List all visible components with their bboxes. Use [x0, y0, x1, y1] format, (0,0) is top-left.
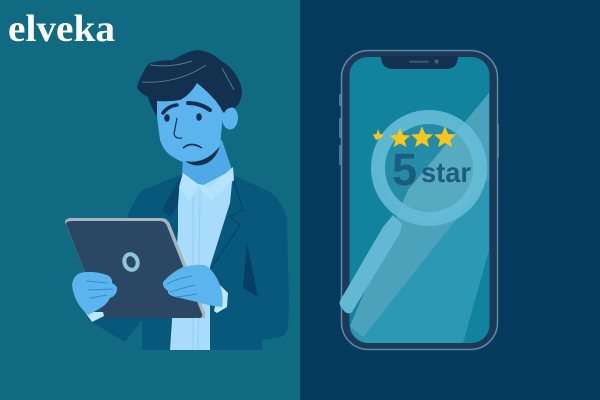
- glare band: [350, 93, 489, 337]
- left hand: [72, 272, 117, 315]
- star 2: [411, 126, 433, 147]
- phone screen: [350, 57, 490, 343]
- tablet logo: [122, 252, 140, 272]
- star 1: [390, 128, 410, 147]
- left eye: [164, 114, 170, 122]
- star 3: [434, 126, 456, 147]
- logo: elveka: elveka: [8, 8, 115, 50]
- right fingers: [167, 276, 197, 297]
- left shirt cuff: [85, 312, 104, 322]
- right eyebrow: [188, 103, 210, 110]
- camera: [434, 59, 439, 64]
- illustration: worried man: [65, 50, 289, 350]
- neck: [182, 140, 232, 188]
- jacket: [88, 175, 289, 350]
- screen glare: [350, 93, 489, 343]
- jaw shadow: [185, 146, 220, 166]
- phone mockup: [339, 50, 499, 350]
- right lapel: [210, 177, 243, 270]
- right hand: [163, 265, 223, 307]
- collar: [179, 167, 234, 201]
- nose: [174, 118, 182, 138]
- tablet back: [66, 221, 202, 318]
- magnifier lens: [378, 117, 480, 219]
- panel: left background: [0, 0, 300, 400]
- rating text: 5: 5: [392, 144, 417, 195]
- hair: [137, 50, 242, 117]
- partial star: [373, 129, 384, 140]
- left eyebrow: [163, 105, 177, 113]
- phone body: [342, 50, 498, 350]
- side buttons: [339, 94, 499, 165]
- speaker: [409, 60, 429, 63]
- tablet edge: [65, 218, 205, 318]
- right eye: [196, 113, 202, 121]
- right cuff: [214, 285, 228, 313]
- frown: [183, 144, 202, 148]
- ear: [222, 106, 238, 130]
- jacket shadow fold: [243, 243, 258, 297]
- tablet: [65, 218, 205, 318]
- face: [157, 75, 223, 163]
- panel: right background: [300, 0, 600, 400]
- left fingers: [86, 281, 113, 298]
- notch: [381, 56, 458, 69]
- left lapel: [162, 177, 180, 217]
- rating text: star: star: [421, 157, 471, 188]
- shirt placket: [193, 190, 200, 350]
- magnifier handle: [340, 215, 402, 314]
- shirt: [170, 172, 233, 350]
- hair highlight: [142, 61, 234, 90]
- stars: [373, 126, 456, 147]
